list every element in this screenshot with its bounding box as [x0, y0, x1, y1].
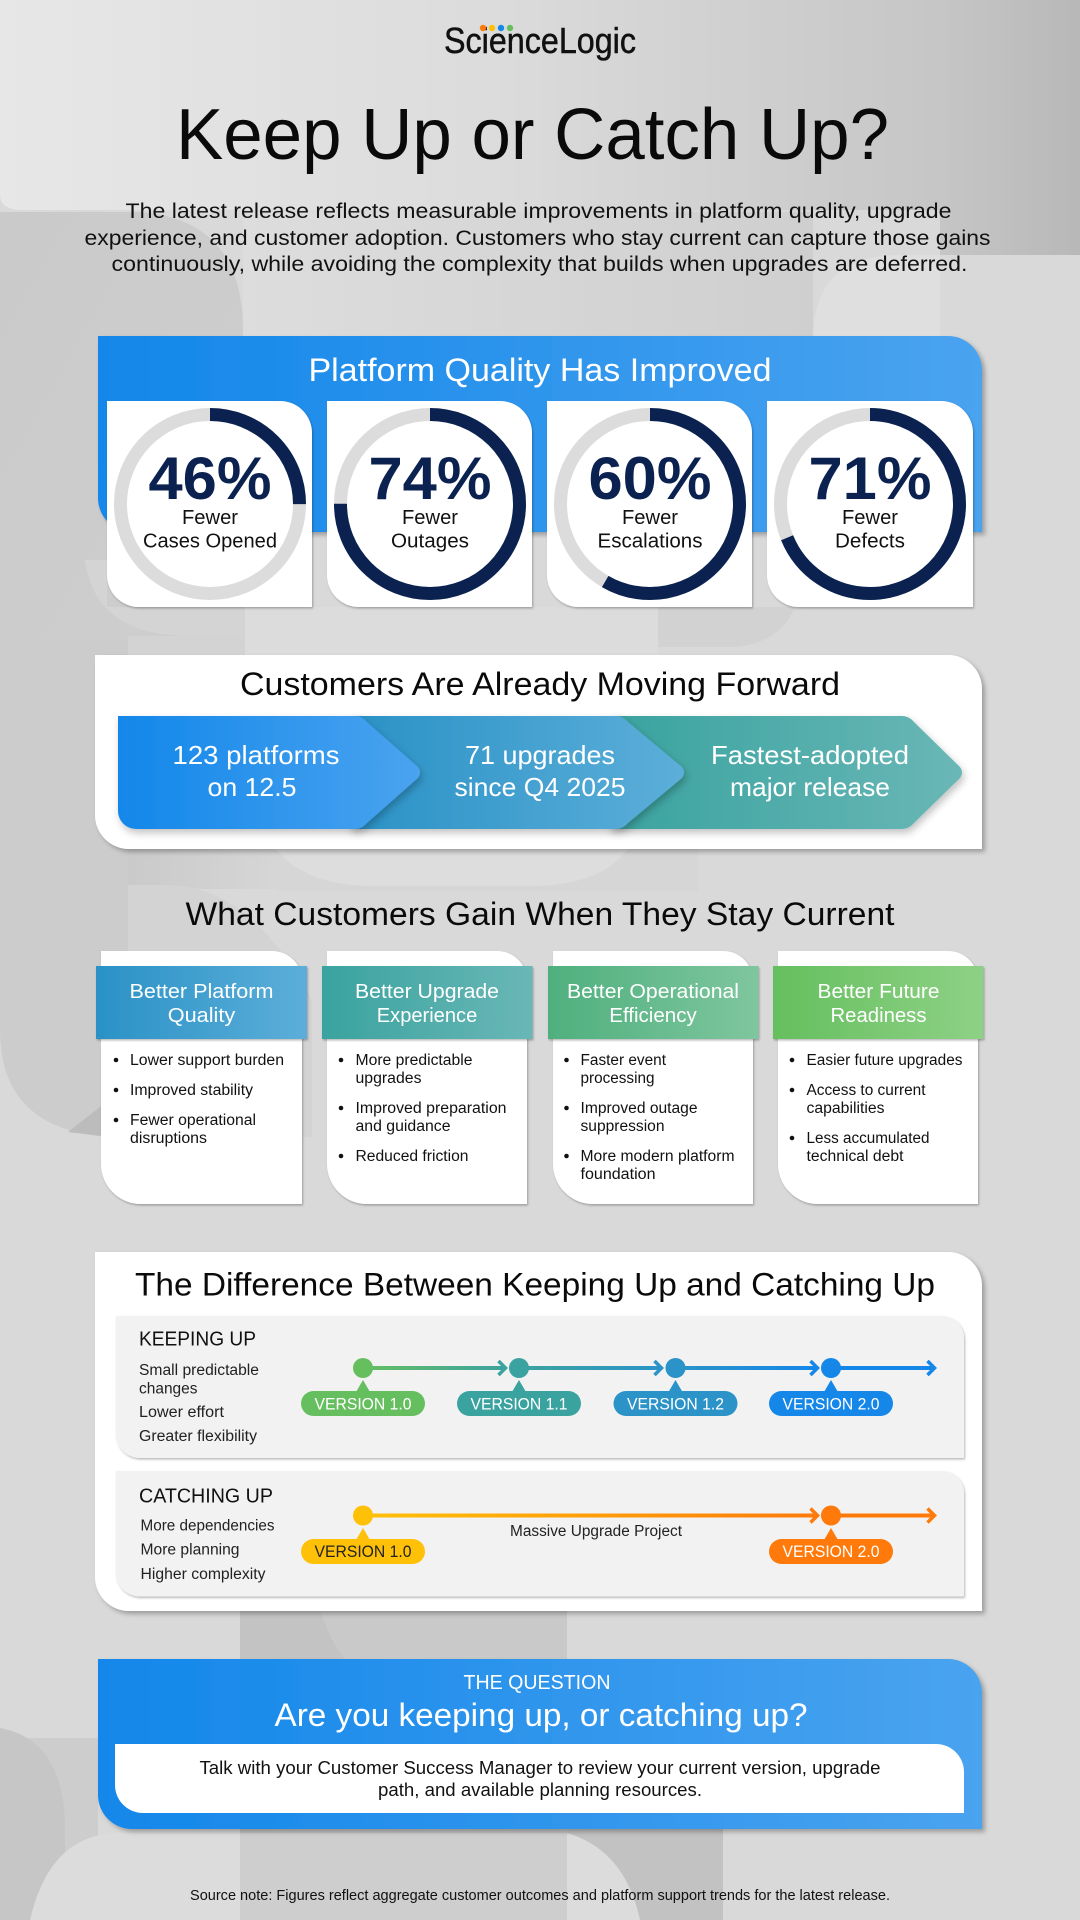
heading: platform quality: Platform Quality Has Improved — [308, 352, 772, 388]
heading: what customers gain: What Customers Gain When They Stay Current — [186, 896, 895, 932]
stat card: 71%: Defects — [835, 530, 905, 552]
bullet list: Improved outage — [580, 1100, 698, 1117]
stat card: 71%: Fewer — [842, 507, 898, 529]
stat card: 60%: Escalations — [598, 530, 702, 552]
intro paragraph — [84, 199, 990, 276]
timeline: massive upgrade — [301, 1506, 934, 1564]
benefit card: operational efficiency: Better Operational — [567, 981, 739, 1003]
stat card: 74%: Outages — [391, 530, 469, 552]
chevron: fastest-adopted: Fastest-adopted — [711, 740, 909, 770]
bullet list: Improved stability — [130, 1082, 253, 1099]
bullet list: Faster event — [580, 1052, 667, 1069]
sub-panel: keeping up — [116, 1316, 964, 1458]
chevron: 71 upgrades — [350, 716, 684, 829]
benefit card: upgrade experience: Experience — [377, 1005, 477, 1027]
call to action box — [115, 1744, 964, 1813]
stat card: 74%: 74% — [368, 445, 492, 512]
chevron: fastest-adopted: major release — [730, 772, 890, 802]
panel: the question call to action: Are you keeping up, or catching up? — [274, 1697, 808, 1733]
stat card: 46%: Fewer — [182, 507, 238, 529]
panel: the question call to action — [98, 1659, 982, 1829]
stat card: 60% — [547, 401, 752, 607]
benefit card: operational efficiency — [548, 951, 758, 1204]
timeline: frequent versions: VERSION 1.1 — [470, 1394, 568, 1414]
sub-panel: catching up: CATCHING UP — [139, 1486, 273, 1508]
panel: difference keeping vs catching — [95, 1252, 982, 1611]
chevron: 71 upgrades: since Q4 2025 — [454, 772, 626, 802]
stat card: 46% — [107, 401, 312, 607]
panel: the question call to action: THE QUESTION — [464, 1672, 610, 1694]
sub-panel: catching up: More dependencies — [140, 1518, 275, 1534]
logo: ScienceLogic: ScienceLogic — [444, 20, 636, 61]
stat card: 46%: 46% — [148, 445, 272, 512]
bullet list: foundation — [580, 1166, 656, 1183]
call to action box: path, and available planning resources. — [378, 1780, 702, 1800]
stat card: 60%: 60% — [588, 445, 712, 512]
bullet list: Easier future upgrades — [806, 1052, 963, 1069]
intro paragraph: experience, and customer adoption. Customers who stay current can capture those gains — [84, 226, 990, 250]
chevron: 123 platforms — [118, 716, 420, 829]
stat card: 71%: 71% — [808, 445, 932, 512]
bullet list: More modern platform — [580, 1148, 734, 1165]
benefit card: platform quality: Better Platform — [130, 981, 274, 1003]
bullet list: Improved preparation — [356, 1100, 506, 1117]
sub-panel: keeping up: changes — [139, 1380, 198, 1398]
timeline: massive upgrade: Massive Upgrade Project — [510, 1523, 683, 1540]
bullet list — [339, 1052, 506, 1165]
benefit card: platform quality: Quality — [168, 1005, 235, 1027]
sub-panel: keeping up: KEEPING UP — [139, 1328, 256, 1350]
sub-panel: keeping up: Greater flexibility — [139, 1428, 257, 1445]
bullet list — [790, 1052, 963, 1165]
title: Keep Up or Catch Up? — [176, 95, 889, 175]
stat card: 74% — [327, 401, 532, 607]
heading: difference: The Difference Between Keeping Up and Catching Up — [135, 1266, 935, 1302]
bullet list: Lower support burden — [130, 1052, 284, 1069]
heading: customers moving forward: Customers Are Already Moving Forward — [240, 666, 840, 702]
timeline: frequent versions: VERSION 1.2 — [627, 1394, 724, 1414]
benefit card: upgrade experience: Better Upgrade — [355, 981, 499, 1003]
chevron: 123 platforms: 123 platforms — [172, 740, 340, 770]
timeline: frequent versions — [301, 1358, 934, 1416]
chevron: 71 upgrades: 71 upgrades — [465, 740, 615, 770]
bullet list — [114, 1052, 284, 1147]
bullet list: upgrades — [356, 1070, 422, 1087]
benefit card: future readiness: Better Future — [818, 981, 940, 1003]
benefit card: operational efficiency: Efficiency — [609, 1005, 697, 1027]
bullet list: Fewer operational — [130, 1112, 256, 1129]
intro paragraph: continuously, while avoiding the complexity that builds when upgrades are deferred. — [112, 252, 968, 276]
benefit card: future readiness — [773, 951, 984, 1204]
bullet list: disruptions — [130, 1130, 207, 1147]
sub-panel: catching up — [116, 1471, 964, 1596]
benefit card: upgrade experience — [322, 951, 532, 1204]
bullet list: Reduced friction — [356, 1148, 468, 1165]
bullet list: Less accumulated — [806, 1130, 930, 1147]
timeline: massive upgrade: VERSION 2.0 — [782, 1542, 880, 1561]
stat card: 60%: Fewer — [622, 507, 678, 529]
bullet list: and guidance — [356, 1118, 450, 1135]
stat card: 74%: Fewer — [402, 507, 458, 529]
panel: platform quality — [98, 336, 982, 607]
sub-panel: catching up: Higher complexity — [140, 1566, 266, 1583]
benefit card: future readiness: Readiness — [830, 1005, 926, 1027]
bullet list: Access to current — [806, 1082, 926, 1099]
bullet list: capabilities — [806, 1100, 885, 1117]
stat card: 71% — [767, 401, 973, 607]
intro paragraph: The latest release reflects measurable improvements in platform quality, upgrade — [126, 199, 952, 223]
bullet list — [564, 1052, 734, 1183]
bullet list: technical debt — [806, 1148, 904, 1165]
bullet list: suppression — [580, 1118, 664, 1135]
timeline: massive upgrade: VERSION 1.0 — [314, 1542, 412, 1561]
call to action box: Talk with your Customer Success Manager to review your current version, upgrade — [200, 1758, 881, 1778]
timeline: frequent versions: VERSION 2.0 — [782, 1394, 880, 1414]
chevron: 123 platforms: on 12.5 — [208, 772, 296, 802]
sub-panel: catching up: More planning — [140, 1542, 240, 1558]
sub-panel: keeping up: Small predictable — [139, 1362, 259, 1379]
panel: customers moving forward — [95, 655, 982, 849]
bullet list: More predictable — [356, 1052, 472, 1069]
bullet list: processing — [580, 1070, 654, 1087]
benefit card: platform quality — [96, 951, 307, 1204]
chevron: fastest-adopted — [610, 716, 962, 829]
stat card: 46%: Cases Opened — [143, 530, 277, 552]
sub-panel: keeping up: Lower effort — [139, 1404, 225, 1421]
timeline: frequent versions: VERSION 1.0 — [314, 1394, 412, 1414]
source note: Source note: Figures reflect aggregate customer outcomes and platform support trends for the latest release. — [190, 1888, 890, 1904]
